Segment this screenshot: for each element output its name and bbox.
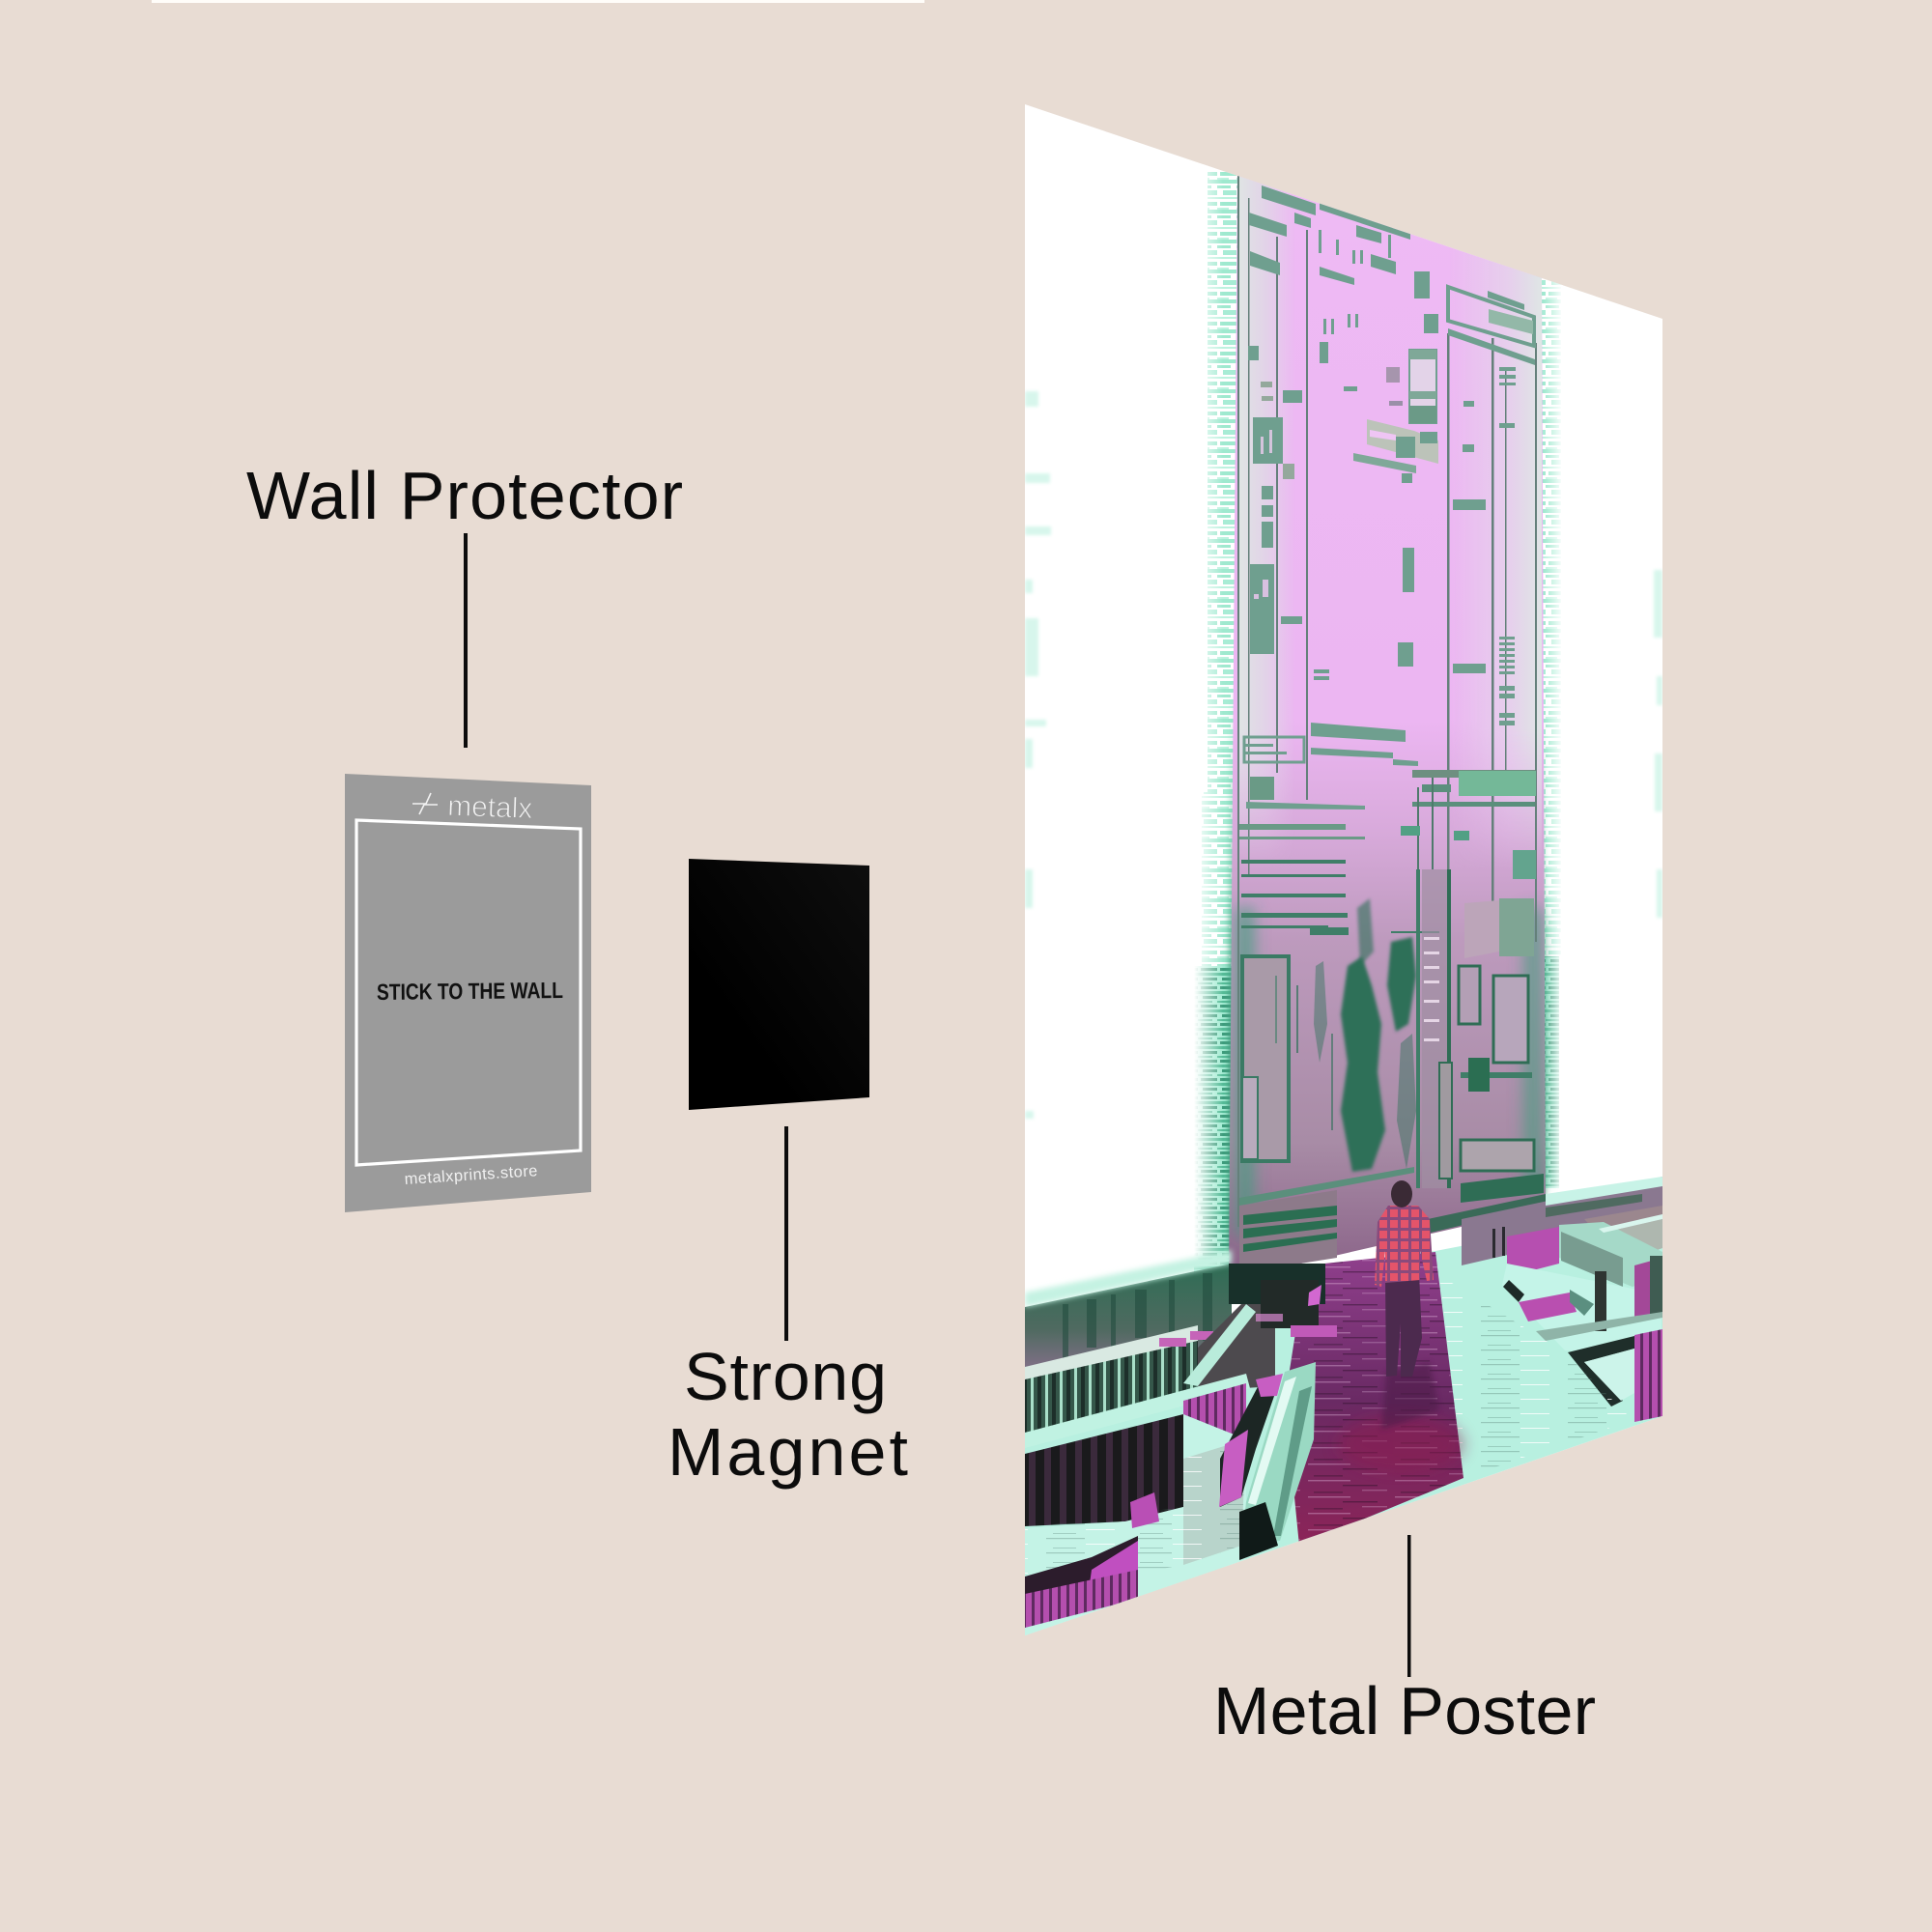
panel: strong magnet — [689, 859, 869, 1110]
lower right panels — [1416, 869, 1544, 1203]
leader line: Wall Protector — [464, 533, 468, 748]
mint hatching at tower sides — [1194, 164, 1563, 1275]
website text: metalxprints.store — [404, 1162, 538, 1188]
wide wall base of tower — [1239, 1167, 1546, 1273]
tower body — [1229, 159, 1546, 1280]
faint mint glitches on poster edges — [1025, 391, 1662, 1119]
fade to white on outer edges — [1194, 164, 1223, 1265]
pale columns at tower sides — [1237, 170, 1542, 869]
gauge box — [1353, 350, 1438, 473]
white strip at top edge — [152, 0, 924, 3]
label: Strong Magnet: Magnet — [668, 1414, 908, 1490]
label: Strong Magnet — [668, 1339, 908, 1490]
left dark block — [1025, 1414, 1183, 1526]
panel: metal poster artwork — [1025, 104, 1662, 1650]
wet shadow — [1338, 1415, 1463, 1473]
left wall ribs — [1063, 1273, 1212, 1362]
right framed panel — [1448, 287, 1535, 407]
railing — [1219, 1362, 1316, 1560]
head — [1391, 1180, 1412, 1208]
label: Metal Poster: Metal Poster — [1213, 1673, 1596, 1748]
vertical seams — [1237, 164, 1537, 1227]
metalx logo text: metalx — [447, 790, 533, 825]
leader line: Metal Poster — [1407, 1535, 1410, 1677]
mint ledge — [1025, 1374, 1250, 1433]
back wall bottom left — [1025, 1264, 1232, 1430]
green shading on lower tower sides — [1236, 908, 1542, 1236]
left floor — [1025, 1414, 1246, 1637]
mint floor streaks — [1440, 1283, 1627, 1466]
right back structures — [1462, 1177, 1662, 1422]
green smear on the tower — [1296, 898, 1416, 1172]
floor base — [1025, 1208, 1662, 1637]
walkway water streaks — [1285, 1252, 1463, 1546]
instruction text: STICK TO THE WALL — [377, 978, 563, 1005]
magenta wall — [1183, 1383, 1246, 1434]
shirt — [1375, 1206, 1434, 1287]
panel: wall protector sheet — [345, 774, 591, 1212]
reflection beneath figure — [1381, 1362, 1439, 1430]
leader line: Strong Magnet — [784, 1126, 788, 1341]
horizon glow left — [1025, 1250, 1232, 1307]
icon: metalx logo mark — [412, 793, 438, 814]
bright green band of machinery — [1239, 770, 1536, 879]
left circuit blocks — [1244, 382, 1365, 810]
left lower wall and railing behind — [1025, 1264, 1337, 1433]
label: Wall Protector: Wall Protector — [246, 458, 683, 533]
circuit panels upper tower — [1248, 185, 1516, 766]
figure: man walking — [1375, 1180, 1434, 1377]
magenta walkway — [1285, 1252, 1463, 1546]
pants — [1385, 1273, 1422, 1377]
label: Strong Magnet: Strong — [684, 1339, 887, 1414]
mid-tower green structure — [1241, 860, 1439, 935]
lower left panel — [1242, 956, 1289, 1161]
